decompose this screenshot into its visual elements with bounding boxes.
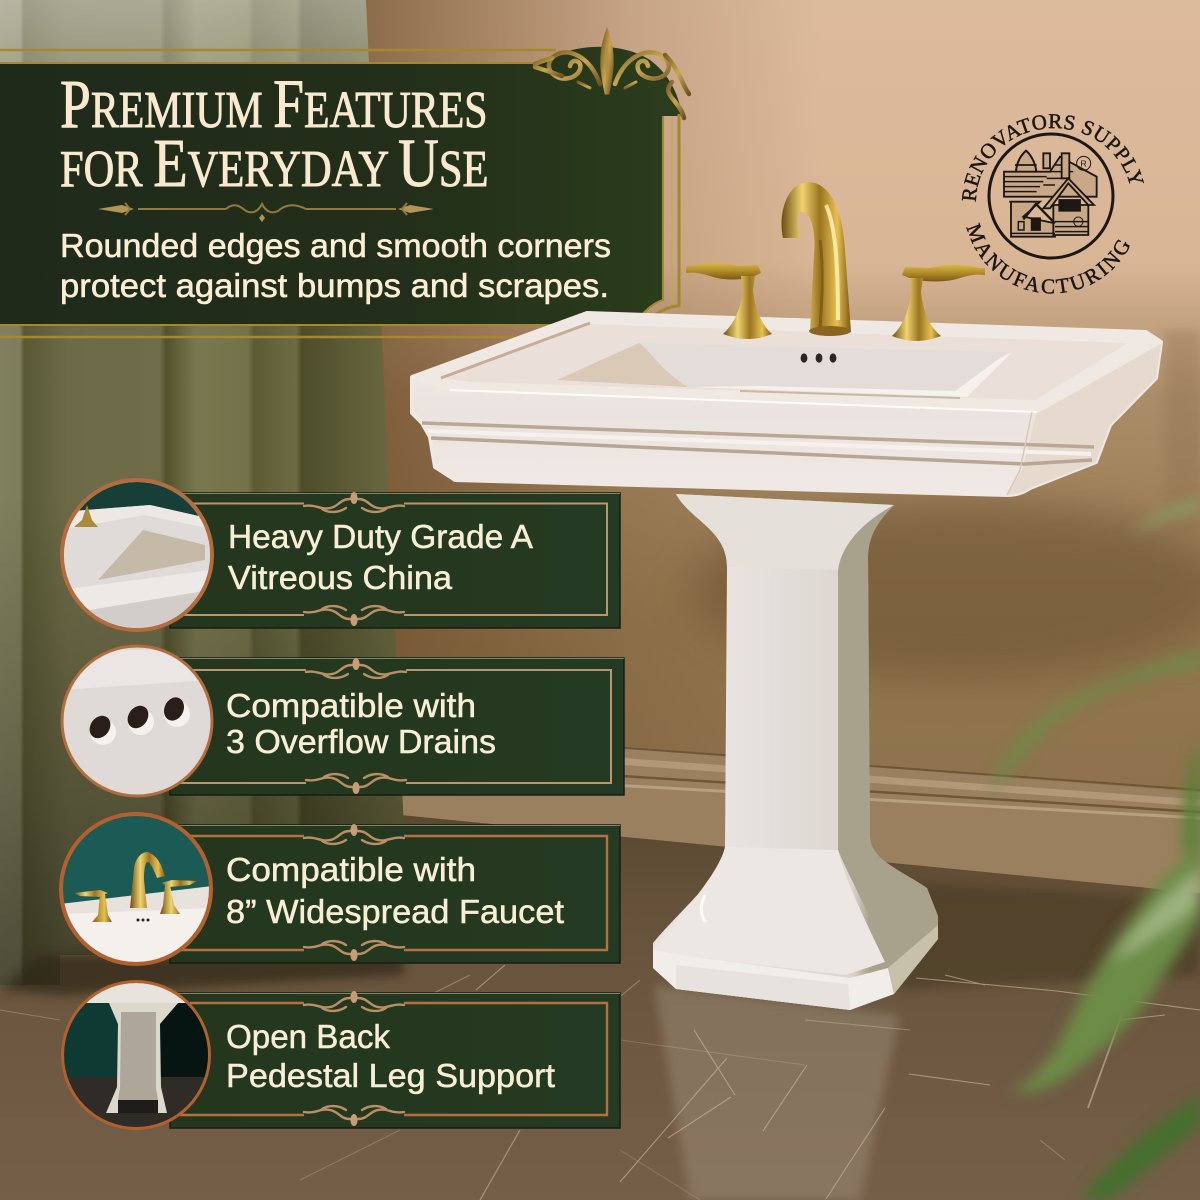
header panel <box>0 34 689 337</box>
faucet <box>686 182 985 341</box>
feature card 1: vitreous china <box>60 480 620 630</box>
card text: Compatible with <box>226 851 476 888</box>
pedestal leg <box>653 494 938 1010</box>
basin bowl <box>557 343 1012 398</box>
title divider ornament <box>98 203 434 222</box>
card text: Open Back <box>226 1018 390 1055</box>
title: FOR EVERYDAY USE <box>60 125 488 201</box>
card text: Vitreous China <box>228 559 453 596</box>
card text: Pedestal Leg Support <box>226 1057 555 1094</box>
logo: Renovators Supply Manufacturing <box>962 114 1144 294</box>
card text: Compatible with <box>226 687 476 724</box>
left handle <box>686 263 772 339</box>
card text: 3 Overflow Drains <box>226 723 496 760</box>
logo lettering: MANUFACTURING <box>966 222 1130 294</box>
overflow holes <box>801 353 836 363</box>
card text: 8” Widespread Faucet <box>226 893 564 930</box>
baseboard moulding <box>380 730 1200 900</box>
title: PREMIUM FEATURES <box>60 65 487 142</box>
header subtitle <box>60 227 611 304</box>
title <box>60 65 488 201</box>
curtain <box>0 0 404 995</box>
card text <box>226 851 564 930</box>
sink basin <box>412 313 1161 495</box>
header subtitle: Rounded edges and smooth corners <box>60 227 611 264</box>
card text <box>228 518 533 596</box>
logo lettering <box>962 114 1144 294</box>
registered mark: R <box>1081 158 1087 168</box>
background: bathroom wall <box>0 0 1200 900</box>
header subtitle: protect against bumps and scrapes. <box>60 267 609 304</box>
floor: marble tile <box>0 780 1200 1200</box>
feature card 4: open back leg <box>62 982 620 1129</box>
logo house <box>1004 151 1097 237</box>
gold corner ornament <box>535 34 689 118</box>
feature card 2: overflow drains <box>60 646 624 796</box>
spout <box>782 182 851 336</box>
thumbnail: drain holes <box>60 646 212 796</box>
right handle <box>892 265 985 341</box>
card text <box>226 1018 555 1094</box>
thumbnail: faucet <box>60 814 212 965</box>
card text: Heavy Duty Grade A <box>228 518 533 555</box>
card text <box>226 687 496 760</box>
plant leaves (blurred foreground) <box>990 498 1200 1200</box>
thumbnail: basin <box>60 480 216 630</box>
thumbnail: pedestal back <box>62 982 210 1129</box>
feature card 3: faucet <box>60 814 620 965</box>
logo lettering: RENOVATORS SUPPLY <box>962 114 1144 202</box>
